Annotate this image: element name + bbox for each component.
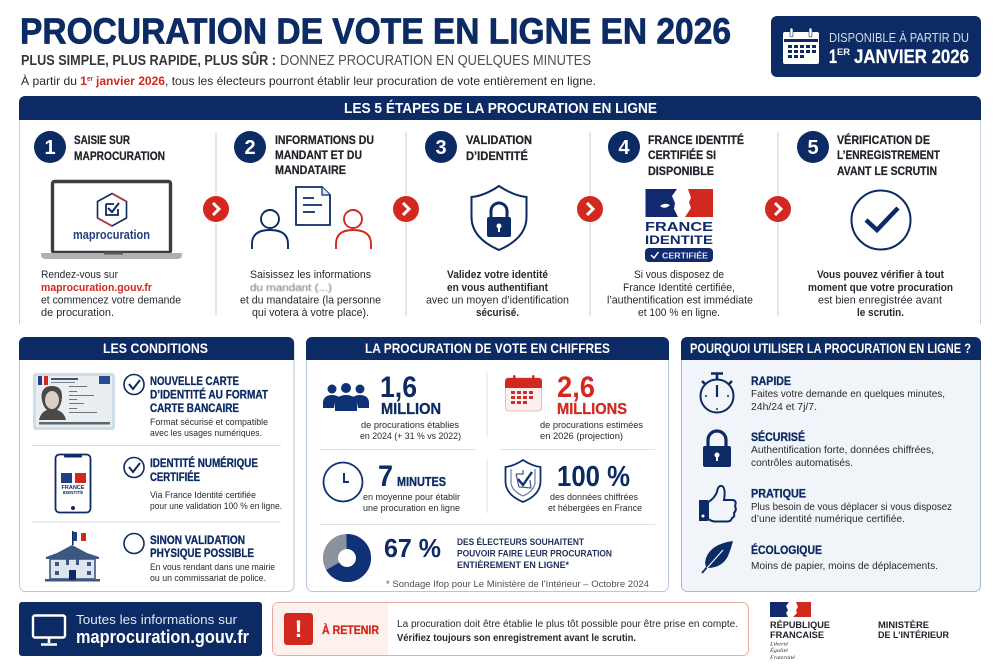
step 3: VALIDATION [466, 133, 532, 147]
footer: reminder: Vérifiez toujours son enregistrement avant le scrutin. [397, 632, 636, 644]
stat: 2,6 millions: en 2026 (projection) [540, 431, 623, 442]
icon: warning [284, 613, 313, 645]
condition 1 text [124, 374, 269, 439]
heading: figures: LA PROCURATION DE VOTE EN CHIFFRES [365, 340, 610, 356]
icon: people [323, 383, 369, 411]
condition 3 text: ou un commissariat de police. [150, 573, 266, 584]
icon: town hall [45, 531, 100, 582]
subtitle: DONNEZ PROCURATION EN QUELQUES MINUTES [280, 53, 591, 69]
intro sentence [21, 73, 596, 88]
logo: République française: FRANCAISE [770, 630, 824, 640]
condition 1 text: avec les usages numériques. [150, 428, 262, 439]
logo: République française: Liberté [769, 642, 789, 648]
footer: website banner: maprocuration.gouv.fr [76, 627, 249, 647]
step 5: L’ENREGISTREMENT [837, 148, 941, 162]
icon: mandant, document, mandataire [252, 187, 371, 249]
condition 1 text: Format sécurisé et compatible [150, 417, 268, 428]
condition 1 text: CARTE BANCAIRE [150, 401, 239, 415]
availability badge: 1 [829, 47, 837, 68]
intro sentence: janvier 2026 [95, 74, 165, 88]
condition 2 text: Via France Identité certifiée [150, 490, 256, 501]
availability badge: JANVIER 2026 [854, 47, 969, 68]
stat: 2,6 millions [505, 371, 643, 442]
icon: warning: ! [294, 616, 302, 643]
step 3: Validez votre identité [447, 269, 548, 281]
stat: 1,6 million: 1,6 [380, 371, 417, 404]
arrow 4 [765, 196, 791, 222]
stat: 2,6 millions: MILLIONS [557, 401, 627, 418]
benefit: écologique [702, 541, 938, 573]
icon: stopwatch [700, 374, 734, 412]
intro sentence: , tous les électeurs pourront établir leur procuration de vote entièrement en ligne. [165, 74, 596, 88]
step 2: MANDATAIRE [275, 163, 346, 177]
step 4: l’authentification est immédiate [607, 294, 753, 306]
stat: 7 minutes [324, 460, 460, 514]
stat: 67 % [330, 533, 649, 590]
icon: thumbs up [699, 486, 736, 522]
benefit: sécurisé: contrôles automatisés. [751, 457, 853, 469]
step 4 [607, 131, 753, 319]
panel: why use it [681, 337, 981, 592]
stat: 2,6 millions: de procurations estimées [540, 420, 643, 431]
stat: 67 %: 67 % [384, 533, 441, 563]
step 5 [797, 131, 953, 319]
step 2: du mandant (...) [250, 283, 332, 294]
stat: 100 %: des données chiffrées [550, 492, 638, 503]
condition 3 text: SINON VALIDATION [150, 533, 245, 547]
step 3: en vous authentifiant [447, 282, 548, 294]
step 5: 5 [807, 137, 819, 159]
benefit: sécurisé: Authentification forte, données chiffrées, [751, 444, 934, 456]
step 5: est bien enregistrée avant [818, 294, 942, 306]
step 4: FRANCE IDENTITÉ [648, 132, 744, 147]
stat: 100 %: 100 % [557, 461, 630, 493]
icon: phone: IDENTITÉ [63, 488, 83, 495]
step 2 [234, 131, 381, 319]
stat: 7 minutes: MINUTES [397, 475, 446, 489]
footer: website banner: Toutes les informations sur [76, 613, 237, 627]
logo: ministère [878, 620, 949, 640]
step 5: le scrutin. [857, 307, 904, 319]
availability badge: ER [837, 47, 850, 58]
logo: République française [769, 602, 830, 661]
benefit: rapide [700, 374, 945, 413]
benefit: écologique: Moins de papier, moins de déplacements. [751, 560, 938, 572]
step 1: de procuration. [41, 307, 114, 319]
footer: reminder: La procuration doit être établie le plus tôt possible pour être prise en compte. [397, 618, 738, 630]
stat: 1,6 million [323, 371, 461, 442]
logo: République française: RÉPUBLIQUE [770, 620, 830, 630]
logo: ministère: DE L’INTÉRIEUR [878, 630, 949, 640]
arrow 1 [203, 196, 229, 222]
icon: red calendar [505, 375, 542, 411]
step 2: MANDANT ET DU [275, 148, 362, 162]
subtitle [21, 51, 591, 69]
availability badge: DISPONIBLE À PARTIR DU [829, 30, 969, 45]
step 1: MAPROCURATION [74, 149, 165, 163]
logo: France Identité certifiée [645, 189, 713, 262]
benefit: pratique: Plus besoin de vous déplacer si vous disposez [751, 501, 952, 513]
logo: France Identité certifiée: CERTIFIÉE [662, 252, 709, 260]
stat: 7 minutes: une procuration en ligne [363, 503, 460, 514]
icon: leaf [702, 541, 733, 573]
step 3 [425, 131, 569, 319]
step 5: moment que votre procuration [808, 282, 953, 294]
stat: 100 %: et hébergées en France [548, 503, 642, 514]
benefit: sécurisé: SÉCURISÉ [751, 429, 805, 444]
step 5: AVANT LE SCRUTIN [837, 164, 937, 178]
condition 2 text [124, 455, 282, 512]
logo: France Identité certifiée: IDENTITE [645, 235, 713, 247]
panel: conditions [19, 337, 294, 592]
logo: République française: Fraternité [769, 656, 796, 661]
condition 3 text [124, 533, 275, 584]
step 1 [34, 131, 182, 319]
step 2: INFORMATIONS DU [275, 133, 374, 147]
stat: 1,6 million: de procurations établies [361, 420, 459, 431]
stat: 7 minutes: en moyenne pour établir [363, 492, 460, 503]
condition 2 text: pour une validation 100 % en ligne. [150, 501, 282, 512]
step 4: France Identité certifiée, [623, 282, 735, 294]
benefit: écologique: ÉCOLOGIQUE [751, 542, 822, 557]
panel: 5 steps [19, 96, 981, 324]
benefit: pratique [699, 486, 952, 525]
step 2: qui votera à votre place). [252, 307, 369, 319]
condition 3 text: PHYSIQUE POSSIBLE [150, 546, 254, 560]
step 2: 2 [244, 137, 256, 159]
stat: 7 minutes: 7 [378, 460, 393, 493]
benefit: sécurisé [703, 429, 934, 469]
stat: 67 %: * Sondage Ifop pour Le Ministère de l’Intérieur – Octobre 2024 [386, 579, 649, 590]
step 1: Rendez-vous sur [41, 269, 118, 281]
icon: monitor [33, 616, 65, 644]
step 3: D’IDENTITÉ [466, 148, 528, 163]
benefit: pratique: PRATIQUE [751, 486, 806, 500]
step 1: maprocuration.gouv.fr [41, 282, 153, 294]
step 1: et commencez votre demande [41, 294, 181, 306]
step 5: VÉRIFICATION DE [837, 132, 930, 147]
icon: check circle [852, 190, 910, 250]
step 4: 4 [618, 137, 630, 159]
donut chart [330, 542, 364, 574]
benefit: rapide: 24h/24 et 7j/7. [751, 401, 817, 413]
icon: calendar [783, 28, 819, 64]
logo: ministère: MINISTÈRE [878, 620, 929, 630]
icon: laptop: maprocuration [73, 227, 150, 242]
logo: République française: Égalité [769, 648, 789, 654]
intro sentence: er [87, 76, 93, 83]
panel: figures [306, 337, 669, 592]
condition 3 text: En vous rendant dans une mairie [150, 562, 275, 573]
icon: data shield [506, 460, 540, 502]
stat: 67 %: DES ÉLECTEURS SOUHAITENT [457, 537, 584, 548]
icon: phone [56, 454, 90, 512]
step 1: SAISIE SUR [74, 133, 130, 147]
step 4: DISPONIBLE [648, 164, 714, 178]
stat: 2,6 millions: 2,6 [557, 371, 595, 404]
benefit: pratique: d’une identité numérique certifiée. [751, 513, 905, 525]
step 4: et 100 % en ligne. [638, 307, 720, 319]
arrow 2 [393, 196, 419, 222]
icon: identity card [33, 373, 115, 430]
stat: 67 %: ENTIÈREMENT EN LIGNE* [457, 560, 569, 571]
footer: reminder [272, 602, 748, 656]
logo: France Identité certifiée: FRANCE [645, 219, 713, 234]
icon: padlock [703, 431, 731, 467]
arrow 3 [577, 196, 603, 222]
stat: 67 %: POUVOIR FAIRE LEUR PROCURATION [457, 548, 612, 560]
condition 1 text: NOUVELLE CARTE [150, 374, 239, 388]
stat: 100 % [506, 460, 642, 514]
step 4: Si vous disposez de [634, 269, 724, 281]
stat: 1,6 million: en 2024 (+ 31 % vs 2022) [360, 431, 461, 442]
step 3: 3 [435, 137, 447, 159]
step 2: Saisissez les informations [250, 269, 371, 281]
intro sentence: 1 [80, 74, 87, 88]
icon: clock [324, 462, 362, 502]
title: PROCURATION DE VOTE EN LIGNE EN 2026 [20, 10, 731, 52]
step 3: sécurisé. [476, 307, 519, 319]
icon: phone: FRANCE [62, 485, 85, 491]
stat: 1,6 million: MILLION [381, 401, 441, 418]
step 2: et du mandataire (la personne [240, 294, 381, 306]
heading: conditions: LES CONDITIONS [103, 340, 208, 356]
condition 1 text: D’IDENTITÉ AU FORMAT [150, 386, 269, 402]
footer: reminder: À RETENIR [322, 622, 379, 637]
step 4: CERTIFIÉE SI [648, 147, 716, 162]
intro sentence: À partir du [21, 73, 77, 88]
subtitle: PLUS SIMPLE, PLUS RAPIDE, PLUS SÛR : [21, 51, 276, 69]
availability badge [771, 16, 981, 77]
condition 2 text: IDENTITÉ NUMÉRIQUE [150, 455, 258, 470]
heading: steps: LES 5 ÉTAPES DE LA PROCURATION EN LIGNE [344, 100, 657, 117]
benefit: rapide: RAPIDE [751, 374, 791, 388]
icon: shield with padlock [472, 186, 526, 250]
condition 2 text: CERTIFIÉE [150, 469, 200, 484]
icon: laptop [41, 182, 182, 259]
benefit: rapide: Faites votre demande en quelques minutes, [751, 388, 945, 400]
step 5: Vous pouvez vérifier à tout [817, 269, 944, 281]
step 1: 1 [44, 137, 56, 159]
footer: website banner [19, 602, 262, 656]
step 3: avec un moyen d’identification [426, 294, 569, 306]
